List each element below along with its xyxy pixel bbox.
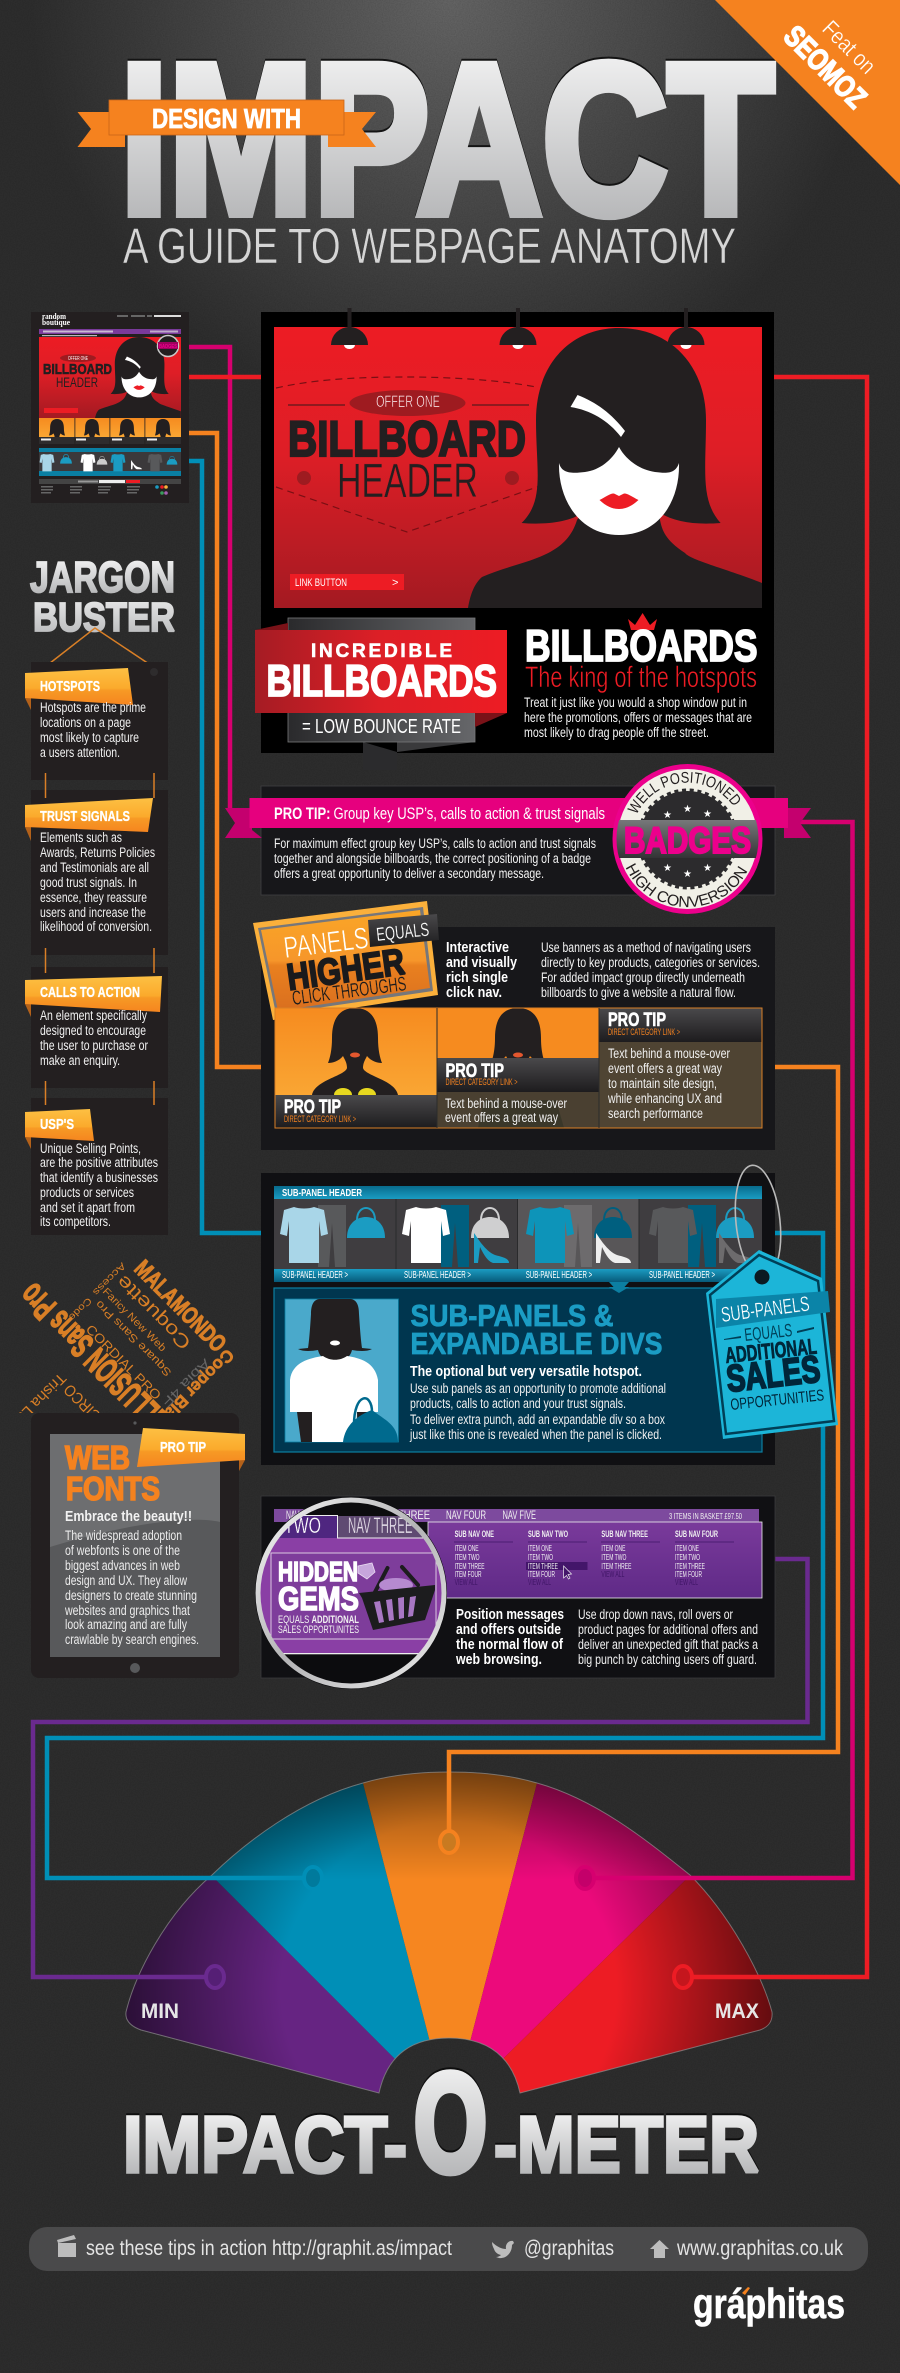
- text: USPs: Unique Selling Points,: [40, 1141, 141, 1156]
- banner: incredible billboards: [255, 618, 507, 770]
- text: position messages: [455, 1607, 564, 1668]
- magnifying glass: hidden gems: [250, 1497, 450, 1689]
- web font type cloud: Access: [90, 1260, 128, 1298]
- jargon panel: calls to action: [25, 967, 168, 1088]
- link button: [290, 574, 404, 590]
- line: purple: [33, 1559, 808, 1977]
- panel: pro tip group key: [225, 786, 811, 895]
- web font type cloud: Abia 4F: [159, 1356, 213, 1410]
- text: calls to action: the user to purchase or: [40, 1038, 148, 1053]
- dropdown menu: SUB NAV THREE: [601, 1529, 648, 1539]
- badge stars: ★: [703, 863, 712, 874]
- text: USPs: products or services: [40, 1185, 134, 1200]
- web font type cloud: Trisha Latin: [1, 1369, 69, 1438]
- text: USPs: and set it apart from: [40, 1200, 135, 1215]
- panel three: event offers a great way: [608, 1061, 722, 1076]
- icon: twitter bird: [492, 2241, 514, 2258]
- dropdown menu: ITEM THREE: [601, 1562, 631, 1571]
- magnified nav: NAV THREE: [348, 1513, 412, 1538]
- text: USPs: are the positive attributes: [40, 1155, 158, 1170]
- dropdown menu: VIEW ALL: [528, 1578, 551, 1587]
- text: calls to action: An element specifically: [40, 1008, 147, 1023]
- text: position messages: and offers outside: [456, 1622, 561, 1638]
- jargon connectors: [46, 773, 154, 1105]
- text: billboards: [524, 695, 752, 740]
- heading: web fonts: [65, 1439, 160, 1507]
- sub-panel footer labels: SUB-PANEL HEADER >: [282, 1270, 348, 1281]
- text: use banners: directly to key products, categories or services.: [541, 955, 760, 970]
- price tag: OPPORTUNITIES: [730, 1387, 825, 1414]
- text: sub-panels: Use sub panels as an opportunity to promote additional: [410, 1381, 666, 1396]
- ribbon: pro tip: [137, 1428, 245, 1471]
- web font type cloud: CIRCO: [61, 1380, 105, 1424]
- jargon panel: trust signals: [25, 790, 168, 955]
- text: trust signals: users and increase the: [40, 905, 146, 920]
- icon: crown: [628, 613, 657, 630]
- panel two: Text behind a mouse-over: [445, 1096, 567, 1111]
- meter segment: magenta: [470, 1783, 690, 2058]
- sub-panel footer labels: SUB-PANEL HEADER >: [649, 1270, 715, 1281]
- magnified caption: [278, 1616, 359, 1633]
- tablet subheading: Embrace the beauty!!: [65, 1508, 192, 1525]
- stitching: [276, 377, 540, 532]
- magnified caption: EQUALS ADDITIONAL: [278, 1614, 359, 1626]
- web font type cloud: Coquette: [113, 1271, 196, 1353]
- badge stars: ★: [683, 869, 692, 880]
- thumbnail billboard: BILLBOARD: [43, 361, 112, 378]
- tag banner: SUB-PANELS: [720, 1293, 811, 1327]
- tablet body text: websites and graphics that: [64, 1603, 190, 1618]
- badge: [612, 764, 762, 914]
- sign: panels equals higher click throughs: PANELS: [282, 922, 370, 965]
- dropdown menu: ITEM ONE: [528, 1544, 552, 1553]
- thumbnail billboard: BADGES: [159, 344, 177, 350]
- text: use banners: [541, 940, 760, 1000]
- badge arc text: WELL POSITIONED: [627, 772, 740, 813]
- ribbon: calls to action: [25, 976, 162, 1017]
- text: hotspots: a users attention.: [40, 745, 120, 760]
- equals tag: [368, 914, 439, 947]
- dropdown menu: [428, 1522, 762, 1598]
- text: billboards: Treat it just like you would a shop window put in: [524, 695, 747, 710]
- text: USPs: [40, 1141, 158, 1229]
- nav bar: NAV ONE: [286, 1510, 316, 1522]
- panel one: DIRECT CATEGORY LINK >: [284, 1114, 356, 1124]
- heading: sub-panels: EXPANDABLE DIVS: [410, 1326, 662, 1361]
- tablet body text: look amazing and are fully: [65, 1617, 187, 1632]
- heading: impact-o-meter: -METER: [494, 2098, 759, 2187]
- footer bar: [29, 2227, 868, 2271]
- heading: sub-panels: [410, 1298, 662, 1361]
- tablet body text: of webfonts is one of the: [65, 1543, 180, 1558]
- tablet: web fonts pro tip: [31, 1413, 245, 1678]
- web font type cloud: [19, 1258, 234, 1413]
- heading: sub-panels: SUB-PANELS &: [410, 1298, 614, 1333]
- heading: impact-o-meter: O: [414, 2042, 487, 2199]
- pink ribbon: [225, 798, 811, 838]
- tablet body text: design and UX. They allow: [65, 1573, 187, 1588]
- text: interactive: click nav.: [446, 985, 502, 1001]
- sign: panels equals higher click throughs: HIGHER: [284, 941, 407, 998]
- sign: panels equals higher click throughs: [253, 901, 439, 1020]
- magnified heading: GEMS: [278, 1580, 359, 1617]
- impact meter dome: [125, 1772, 773, 2094]
- price tag: [706, 1163, 838, 1439]
- panel three: search performance: [608, 1106, 703, 1121]
- heading: web fonts: FONTS: [66, 1470, 160, 1507]
- lamps: [331, 308, 704, 349]
- node: red: [674, 1966, 692, 1988]
- text: pro tip: offers a great opportunity to deliver a secondary message.: [274, 866, 544, 881]
- thumbnail billboard: [39, 336, 181, 419]
- magnified nav: TWO: [284, 1513, 321, 1538]
- badge arc text: HIGH CONVERSION: [626, 863, 748, 908]
- magnified nav: [279, 1516, 422, 1538]
- thumbnail billboard: OFFER ONE: [68, 356, 88, 362]
- meter connector nodes: [206, 1831, 692, 1988]
- ribbon: calls to action: CALLS TO ACTION: [40, 984, 140, 1001]
- badge stars: [663, 804, 712, 880]
- dropdown menu: ITEM ONE: [601, 1544, 625, 1553]
- panel three: [599, 1008, 762, 1128]
- dropdown menu: ITEM TWO: [528, 1553, 553, 1562]
- dropdown menu: ITEM FOUR: [528, 1570, 555, 1579]
- panel: hidden gems: [261, 1496, 775, 1678]
- sub-panel footer labels: SUB-PANEL HEADER >: [526, 1270, 592, 1281]
- sign: panels equals higher click throughs: CLICK THROUGHS: [291, 973, 408, 1010]
- text: hotspots: [40, 700, 146, 760]
- jargon buster heading: JARGON: [30, 553, 175, 602]
- line: blue: [47, 461, 823, 1878]
- thumbnail: full page layout: [31, 312, 189, 503]
- dropdown menu: ITEM FOUR: [675, 1570, 702, 1579]
- link: twitter: @graphitas: [524, 2237, 614, 2260]
- equals tag: EQUALS: [375, 920, 430, 946]
- web font type cloud: CORDIAL PRO: [83, 1322, 164, 1403]
- pink ribbon: Group key USP’s, calls to action & trust signals: [334, 804, 605, 823]
- panel two: PRO TIP: [446, 1061, 504, 1082]
- text: drop down navs: [578, 1607, 758, 1667]
- web font type cloud: MALAMONDO: [129, 1255, 231, 1358]
- jargon hanging strings: [45, 628, 155, 668]
- text: calls to action: designed to encourage: [40, 1023, 146, 1038]
- ribbon: USPs: [25, 1109, 94, 1149]
- tag string: [730, 1163, 786, 1281]
- text: sub-panels: [409, 1381, 666, 1442]
- header heading: HEADER: [337, 455, 478, 508]
- badge text: BADGES: BADGES: [624, 820, 751, 861]
- thumbnail sub-panels: [39, 448, 181, 476]
- banner: incredible billboards: BILLBOARDS: [266, 657, 497, 706]
- text: interactive: Interactive: [446, 940, 509, 956]
- tablet body text: The widespread adoption: [65, 1528, 182, 1543]
- line: orange: [189, 433, 838, 1842]
- text: interactive: [446, 940, 517, 1001]
- tablet body text: crawlable by search engines.: [65, 1632, 199, 1647]
- web font type cloud: Code: [66, 1295, 94, 1322]
- line: magenta to meter: [585, 822, 852, 1878]
- text: trust signals: Awards, Returns Policies: [40, 845, 155, 860]
- icon: cursor: [564, 1566, 572, 1579]
- dropdown menu: ITEM FOUR: [455, 1570, 482, 1579]
- text: drop down navs: Use drop down navs, roll overs or: [578, 1607, 733, 1622]
- text: sub-panels: To deliver extra punch, add an expandable div so a box: [410, 1412, 665, 1427]
- magnified caption: SALES OPPORTUNITES: [278, 1624, 359, 1636]
- text: trust signals: and Testimonials are all: [40, 860, 149, 875]
- panel two: DIRECT CATEGORY LINK >: [446, 1077, 518, 1087]
- connector lines: [33, 347, 867, 1977]
- subheading: king of the hotspots: The king of the hotspots: [525, 661, 757, 694]
- nav bar: NAV FOUR: [446, 1510, 486, 1522]
- dropdown menu: ITEM ONE: [675, 1544, 699, 1553]
- expandable div: [274, 1287, 762, 1452]
- text: USPs: its competitors.: [40, 1214, 111, 1229]
- text: drop down navs: product pages for additional offers and: [578, 1622, 758, 1637]
- panel one: PRO TIP: [284, 1097, 341, 1118]
- badge stars: ★: [663, 810, 672, 821]
- dropdown menu: SUB NAV TWO: [528, 1529, 568, 1539]
- heading: web fonts: WEB: [65, 1439, 130, 1476]
- web font type cloud: Cooper Black: [146, 1345, 238, 1437]
- tablet body text: biggest advances in web: [65, 1558, 180, 1573]
- tablet body text: [64, 1528, 199, 1647]
- text: billboards: here the promotions, offers or messages that are: [524, 710, 752, 725]
- banner: incredible billboards: INCREDIBLE: [311, 641, 452, 662]
- heading: impact-o-meter: O: [414, 2044, 487, 2201]
- corner flag: feat on seomoz: SEOMOZ: [777, 20, 873, 115]
- dropdown menu: SUB NAV ONE: [455, 1529, 494, 1539]
- icon: clapperboard: [57, 2235, 76, 2257]
- text: position messages: the normal flow of: [456, 1637, 563, 1653]
- meter segment: purple: [126, 1880, 394, 2093]
- text: interactive: and visually: [446, 955, 517, 971]
- text: trust signals: likelihood of conversion.: [40, 919, 152, 934]
- text: USPs: that identify a businesses: [40, 1170, 158, 1185]
- nav bar: 3 ITEMS IN BASKET £97.50: [669, 1512, 742, 1521]
- min label: MIN: [141, 2000, 179, 2023]
- text: interactive: rich single: [446, 970, 508, 986]
- text: use banners: For added impact group directly underneath: [541, 970, 745, 985]
- line: magenta: [189, 347, 230, 812]
- sub-panel footer labels: [274, 1269, 762, 1293]
- thumbnail logo: boutique: [42, 318, 70, 327]
- text: hotspots: Hotspots are the prime: [40, 700, 146, 715]
- tablet body text: designers to create stunning: [65, 1588, 197, 1603]
- text: hotspots: locations on a page: [40, 715, 131, 730]
- panel two: [437, 1008, 599, 1128]
- ribbon: pro tip: PRO TIP: [160, 1439, 206, 1456]
- text: pro tip: together and alongside billboards, the correct positioning of a badge: [274, 851, 591, 866]
- nav bar: NAV FIVE: [502, 1510, 536, 1522]
- heading: impact-o-meter: -METER: [494, 2100, 759, 2189]
- offer one label: OFFER ONE: [376, 392, 440, 411]
- panel: sub-panels: [261, 1173, 775, 1465]
- panel: banners: [253, 901, 775, 1150]
- web font type cloud: Square Sans Pro: [94, 1298, 174, 1378]
- panel two: event offers a great way: [445, 1110, 558, 1125]
- icon: basket: [359, 1567, 435, 1630]
- text: sub-panels: products, calls to action and your trust signals.: [410, 1396, 626, 1411]
- text: use banners: Use banners as a method of navigating users: [541, 940, 751, 955]
- price tag: SALES: [724, 1349, 822, 1401]
- thumbnail footer: [39, 479, 181, 495]
- heading: impact-o-meter: IMPACT-: [123, 2098, 407, 2187]
- dropdown menu: VIEW ALL: [455, 1578, 478, 1587]
- nav bar: [274, 1509, 759, 1522]
- sub-panel footer labels: SUB-PANEL HEADER >: [404, 1270, 471, 1281]
- panel three: Text behind a mouse-over: [608, 1046, 730, 1061]
- jargon buster heading: [30, 553, 175, 640]
- node: orange: [440, 1831, 458, 1853]
- ribbon: hotspots: HOTSPOTS: [40, 678, 100, 695]
- dropdown menu: ITEM TWO: [455, 1553, 480, 1562]
- price tag: ADDITIONAL: [724, 1333, 818, 1368]
- thumbnail billboard: HEADER: [56, 374, 98, 390]
- banner: incredible billboards: = LOW BOUNCE RATE: [302, 716, 461, 738]
- subheading: optional hotspot: The optional but very versatile hotspot.: [410, 1363, 642, 1380]
- product cells: [274, 1199, 762, 1282]
- line: red: [189, 377, 867, 1977]
- node: magenta: [576, 1867, 594, 1889]
- dropdown menu: ITEM THREE: [675, 1562, 705, 1571]
- logo: graphitas: gráphitas: [693, 2280, 845, 2327]
- sub-panel header bar: [274, 1186, 762, 1199]
- max label: MAX: [715, 2000, 759, 2023]
- jargon panel: USPs: [25, 1098, 168, 1235]
- text: trust signals: essence, they reassure: [40, 890, 147, 905]
- jargon panel: hotspots: [25, 662, 168, 780]
- web font type cloud: Faricy New Web: [100, 1286, 169, 1354]
- panel three: DIRECT CATEGORY LINK >: [608, 1027, 680, 1037]
- ribbon: design with: DESIGN WITH: [152, 103, 301, 134]
- corner flag: feat on seomoz: Feat on: [817, 15, 881, 79]
- panel three: PRO TIP: [608, 1010, 666, 1031]
- price tag: EQUALS: [743, 1320, 793, 1345]
- link button: >: [392, 577, 398, 589]
- ribbon: trust signals: TRUST SIGNALS: [40, 808, 130, 825]
- dropdown menu: VIEW ALL: [601, 1570, 625, 1579]
- dropdown menu: SUB NAV FOUR: [675, 1529, 718, 1539]
- ribbon: USPs: USP'S: [40, 1116, 74, 1133]
- offer one label: [288, 390, 529, 416]
- icon: house: [650, 2240, 669, 2258]
- billboard heading: BILLBOARD: [288, 411, 526, 467]
- thumbnail logo: [42, 312, 70, 327]
- icon: gem: [358, 1563, 375, 1579]
- text: sub-panels: just like this one is revealed when the panel is clicked.: [409, 1427, 662, 1442]
- nav bar: THREE: [398, 1510, 430, 1522]
- billboard artwork: [274, 327, 762, 608]
- text: pro tip: [274, 836, 596, 881]
- text: calls to action: make an enquiry.: [40, 1053, 120, 1068]
- jargon buster heading: BUSTER: [33, 594, 175, 640]
- text: trust signals: Elements such as: [40, 830, 122, 845]
- ribbon: trust signals: [25, 798, 153, 841]
- text: position messages: web browsing.: [455, 1652, 542, 1668]
- text: drop down navs: deliver an unexpected gift that packs a: [578, 1637, 758, 1652]
- meter segment: blue: [212, 1783, 430, 2059]
- hero panels: [275, 1008, 762, 1128]
- badge stars: ★: [663, 863, 672, 874]
- ribbon: design with: [78, 100, 376, 147]
- pink ribbon: PRO TIP:: [274, 804, 330, 823]
- illustration: woman with sunglasses: [468, 328, 762, 608]
- panel one: [275, 1008, 437, 1128]
- badge arc text: [626, 772, 748, 908]
- badge stars: ★: [683, 804, 692, 815]
- text: calls to action: [40, 1008, 148, 1068]
- text: position messages: Position messages: [456, 1607, 564, 1623]
- text: pro tip: For maximum effect group key USP’s, calls to action and trust signals: [274, 836, 596, 851]
- node: blue: [304, 1867, 322, 1889]
- text: hotspots: most likely to capture: [40, 730, 139, 745]
- link button: LINK BUTTON: [295, 577, 347, 589]
- heading: impact-o-meter: IMPACT-: [123, 2100, 407, 2189]
- badge stars: ★: [703, 809, 712, 820]
- link: tips: see these tips in action http://graphit.as/impact: [86, 2237, 452, 2260]
- dropdown menu: ITEM TWO: [601, 1553, 626, 1562]
- ribbon: hotspots: [25, 668, 133, 710]
- meter segment: red: [504, 1876, 772, 2093]
- text: use banners: billboards to give a website a natural flow.: [541, 985, 736, 1000]
- dropdown menu: ITEM THREE: [455, 1562, 485, 1571]
- heading: billboards: BILLBOARDS: [525, 622, 758, 671]
- sub-panel header bar: SUB-PANEL HEADER: [282, 1187, 362, 1199]
- portrait: [285, 1299, 398, 1442]
- text: trust signals: good trust signals. In: [40, 875, 137, 890]
- dropdown menu: VIEW ALL: [675, 1578, 698, 1587]
- meter segment: orange: [363, 1772, 537, 2040]
- magnified heading: [278, 1561, 358, 1611]
- dropdown menu: ITEM TWO: [675, 1553, 700, 1562]
- thumbnail panels: [39, 418, 181, 445]
- link: website: www.graphitas.co.uk: [676, 2237, 843, 2260]
- magnified heading: HIDDEN: [278, 1556, 358, 1587]
- badge band: [615, 820, 760, 858]
- panel three: to maintain site design,: [608, 1076, 717, 1091]
- text: drop down navs: big punch by catching users off guard.: [578, 1652, 757, 1667]
- corner flag: feat on seomoz: [715, 0, 900, 185]
- panel three: while enhancing UX and: [607, 1091, 722, 1106]
- dropdown menu: ITEM ONE: [455, 1544, 479, 1553]
- dropdown menu: ITEM THREE: [528, 1562, 558, 1571]
- text: trust signals: [40, 830, 155, 934]
- panel: billboards: [255, 308, 774, 770]
- heading: impact-o-meter: [123, 2042, 759, 2201]
- node: purple: [206, 1966, 224, 1988]
- thumbnail logo: random: [42, 312, 66, 321]
- text: billboards: most likely to drag people off the street.: [524, 725, 709, 740]
